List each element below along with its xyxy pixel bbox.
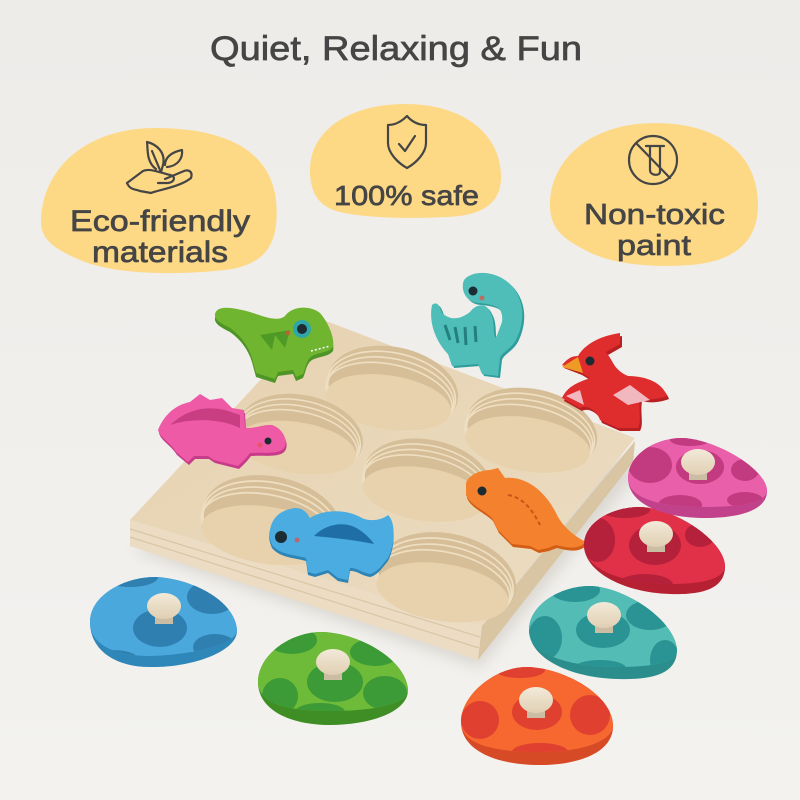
badge: eco-friendly materials [41,128,277,273]
board side right [478,441,635,660]
badge: non-toxic paint [550,123,758,266]
label line 2: materials [92,236,228,269]
badge: 100% safe [310,104,501,218]
board top [130,318,635,626]
icon: plant in hand [127,142,192,193]
egg piece: red [581,502,725,596]
label: Non-toxic [584,199,725,231]
peg [639,521,673,552]
icon: crossed flask [629,136,677,184]
label: 100% safe [334,180,479,211]
dino: teal long-neck [431,273,524,378]
dino: orange triceratops [466,468,587,553]
dino: red pterosaur [562,333,669,431]
egg slot 5 [195,463,349,577]
peg [681,449,715,480]
badge shape [550,123,758,266]
dino: pink stegosaurus [158,394,287,469]
egg slot 1 [320,334,466,442]
egg slot 2 [232,383,370,485]
egg piece: green [258,626,408,725]
egg piece: blue [90,577,237,667]
egg piece: pink [628,434,767,518]
label: Eco-friendly [70,205,250,238]
egg slot 6 [370,520,524,634]
peg [519,687,553,718]
egg slot 4 [356,427,500,533]
dino: blue dimetrodon [269,508,394,583]
badge shape [41,128,277,273]
board side left [130,520,482,660]
icon: shield with check [388,116,426,168]
egg piece: teal [529,586,677,680]
plywood lines [130,449,634,648]
peg [587,602,621,633]
title: Quiet, Relaxing & Fun [210,30,582,68]
wooden board [130,318,640,668]
egg piece: orange [461,662,613,765]
egg slot 3 [459,376,605,484]
label line 2: paint [617,230,691,262]
board shadow [130,450,640,668]
badge shape [310,104,501,218]
peg [147,593,181,624]
peg [316,649,350,680]
dino: green t-rex [215,308,333,383]
